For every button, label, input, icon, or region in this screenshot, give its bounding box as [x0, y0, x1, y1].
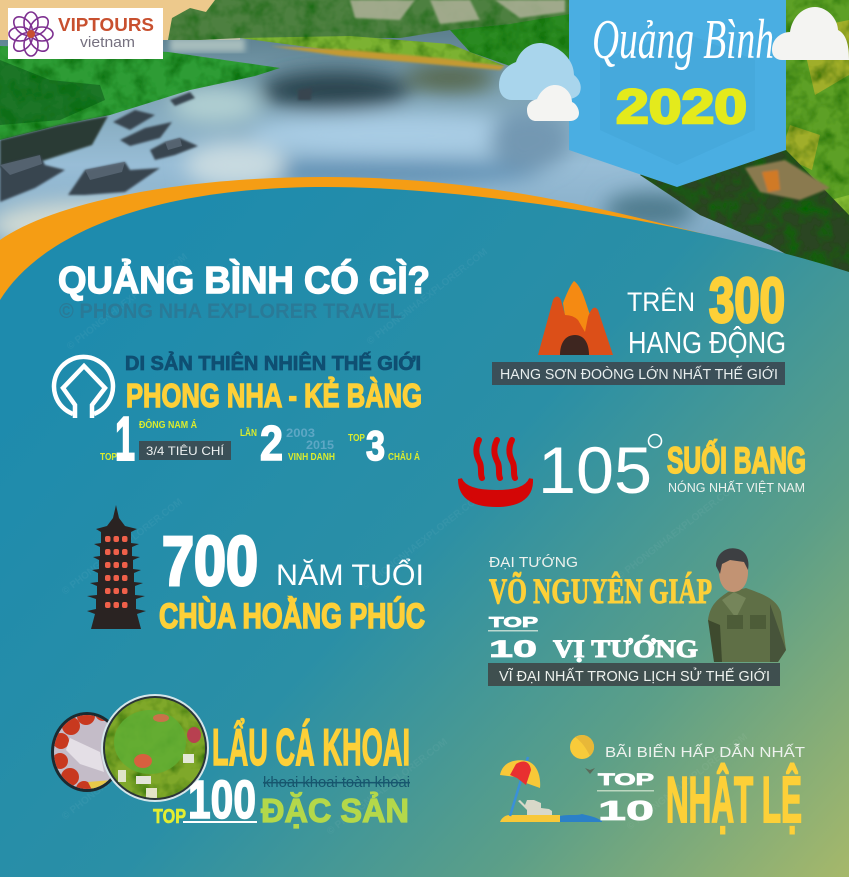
panel: Lẩu cá khoai: ĐẶC SẢN — [261, 792, 409, 829]
panel: 700 years pagoda: NĂM TUỔI — [276, 558, 424, 592]
watermarks — [60, 247, 750, 837]
panel: world heritage Phong Nha - Kẻ Bàng: 3 — [366, 422, 385, 469]
panel: 700 years pagoda: 700 — [162, 522, 258, 600]
watermarks: © PHONGNHAEXPLORER.COM — [60, 497, 185, 597]
icon: sun — [570, 735, 594, 759]
logo: Viptours Vietnam: VIPTOURS — [58, 15, 154, 35]
panel: 300 caves: TRÊN — [627, 286, 695, 317]
panel: Lẩu cá khoai: LẨU CÁ KHOAI — [212, 718, 410, 777]
teal background panel — [0, 187, 849, 877]
panel: 300 caves: 300 — [709, 266, 785, 336]
icon: beach scene — [500, 757, 602, 822]
icon: degree sign — [648, 434, 662, 448]
watermarks: © PHONGNHAEXPLORER.COM — [65, 252, 190, 352]
panel: Lẩu cá khoai: khoai khoai toàn khoai — [263, 774, 410, 791]
panel: General Võ Nguyên Giáp — [488, 548, 786, 686]
panel: Lẩu cá khoai — [50, 694, 410, 830]
panel: world heritage Phong Nha - Kẻ Bàng: 2015 — [306, 438, 334, 452]
icon: cave mountain — [538, 281, 613, 355]
panel: Nhật Lệ beach — [500, 735, 805, 836]
panel: world heritage Phong Nha - Kẻ Bàng: ĐÔNG NAM Á — [139, 418, 197, 431]
tag: 3/4 tiêu chí: 3/4 TIÊU CHÍ — [146, 443, 225, 458]
panel: world heritage Phong Nha - Kẻ Bàng: PHONG NHA - KẺ BÀNG — [126, 377, 422, 414]
panel: world heritage Phong Nha - Kẻ Bàng: TOP — [348, 433, 365, 444]
icon: cloud small white — [527, 85, 579, 121]
watermarks: © PHONGNHAEXPLORER.COM — [615, 482, 740, 582]
panel: General Võ Nguyên Giáp: ĐẠI TƯỚNG — [489, 554, 578, 571]
watermarks: © PHONGNHAEXPLORER.COM — [625, 732, 750, 832]
panel: General Võ Nguyên Giáp: 10 — [489, 636, 537, 663]
banner: Quảng Bình 2020 — [569, 0, 786, 187]
icon: lotus flower — [9, 12, 53, 56]
panel: world heritage Phong Nha - Kẻ Bàng: TOP — [100, 452, 117, 463]
image: hot pot — [101, 694, 209, 802]
logo: Viptours Vietnam: vietnam — [80, 34, 135, 51]
panel: Nhật Lệ beach: BÃI BIỂN HẤP DẪN NHẤT — [605, 743, 805, 761]
panel: Lẩu cá khoai: 100 — [188, 770, 256, 830]
icon: pagoda — [87, 505, 146, 629]
panel: General Võ Nguyên Giáp: TOP — [489, 614, 538, 631]
panel: 700 years pagoda — [87, 505, 425, 636]
panel: 300 caves: HANG ĐỘNG — [628, 325, 786, 360]
panel: General Võ Nguyên Giáp: VỊ TƯỚNG — [553, 635, 698, 663]
panel: 700 years pagoda: CHÙA HOẰNG PHÚC — [159, 596, 425, 636]
panel: Nhật Lệ beach: TOP — [598, 770, 654, 789]
tag: greatest in history: VĨ ĐẠI NHẤT TRONG LỊCH SỬ THẾ GIỚI — [499, 667, 770, 685]
watermark credit: © PHONG NHA EXPLORER TRAVEL — [59, 300, 402, 323]
panel: Nhật Lệ beach: 10 — [598, 795, 654, 826]
banner: Quảng Bình 2020: 2020 — [616, 81, 747, 134]
panel: world heritage Phong Nha - Kẻ Bàng: 1 — [115, 405, 135, 474]
watermarks: © PHONGNHAEXPLORER.COM — [325, 737, 450, 837]
panel: hot spring 105 degrees: 105 — [538, 433, 652, 507]
panel: hot spring 105 degrees — [460, 433, 806, 507]
panel: world heritage Phong Nha - Kẻ Bàng: DI SẢN THIÊN NHIÊN THẾ GIỚI — [125, 351, 421, 375]
image: plate of fish and tomatoes — [50, 705, 125, 797]
panel: world heritage Phong Nha - Kẻ Bàng: LẦN — [240, 426, 257, 439]
tag: 3/4 tiêu chí — [139, 441, 231, 460]
orange swoosh — [0, 177, 712, 320]
watermarks: © PHONGNHAEXPLORER.COM — [360, 492, 485, 592]
logo: Viptours Vietnam — [8, 8, 163, 59]
title: QUẢNG BÌNH CÓ GÌ? — [58, 258, 430, 302]
panel: world heritage Phong Nha - Kẻ Bàng: 2 — [260, 417, 283, 471]
panel: world heritage Phong Nha - Kẻ Bàng: VINH DANH — [288, 452, 335, 463]
panel: world heritage Phong Nha - Kẻ Bàng: CHÂU Á — [388, 450, 420, 463]
panel: hot spring 105 degrees: NÓNG NHẤT VIỆT NAM — [668, 480, 805, 495]
portrait: general — [708, 548, 786, 662]
panel: world heritage Phong Nha - Kẻ Bàng: 2003 — [286, 426, 315, 440]
panel: world heritage Phong Nha - Kẻ Bàng — [54, 351, 422, 474]
background photo: river landscape — [0, 0, 849, 300]
icon: cloud large white — [772, 7, 849, 60]
icon: world heritage emblem — [54, 357, 113, 418]
tag: Hang Sơn Đoòng: HANG SƠN ĐOÒNG LỚN NHẤT THẾ GIỚI — [500, 366, 778, 383]
panel: General Võ Nguyên Giáp: VÕ NGUYÊN GIÁP — [489, 571, 712, 611]
panel: Lẩu cá khoai: TOP — [153, 806, 186, 828]
watermarks: © PHONGNHAEXPLORER.COM — [60, 722, 185, 822]
icon: hot spring — [460, 440, 531, 505]
panel: 300 caves — [492, 266, 786, 385]
icon: cloud blue — [499, 43, 581, 100]
watermarks: © PHONGNHAEXPLORER.COM — [365, 247, 490, 347]
